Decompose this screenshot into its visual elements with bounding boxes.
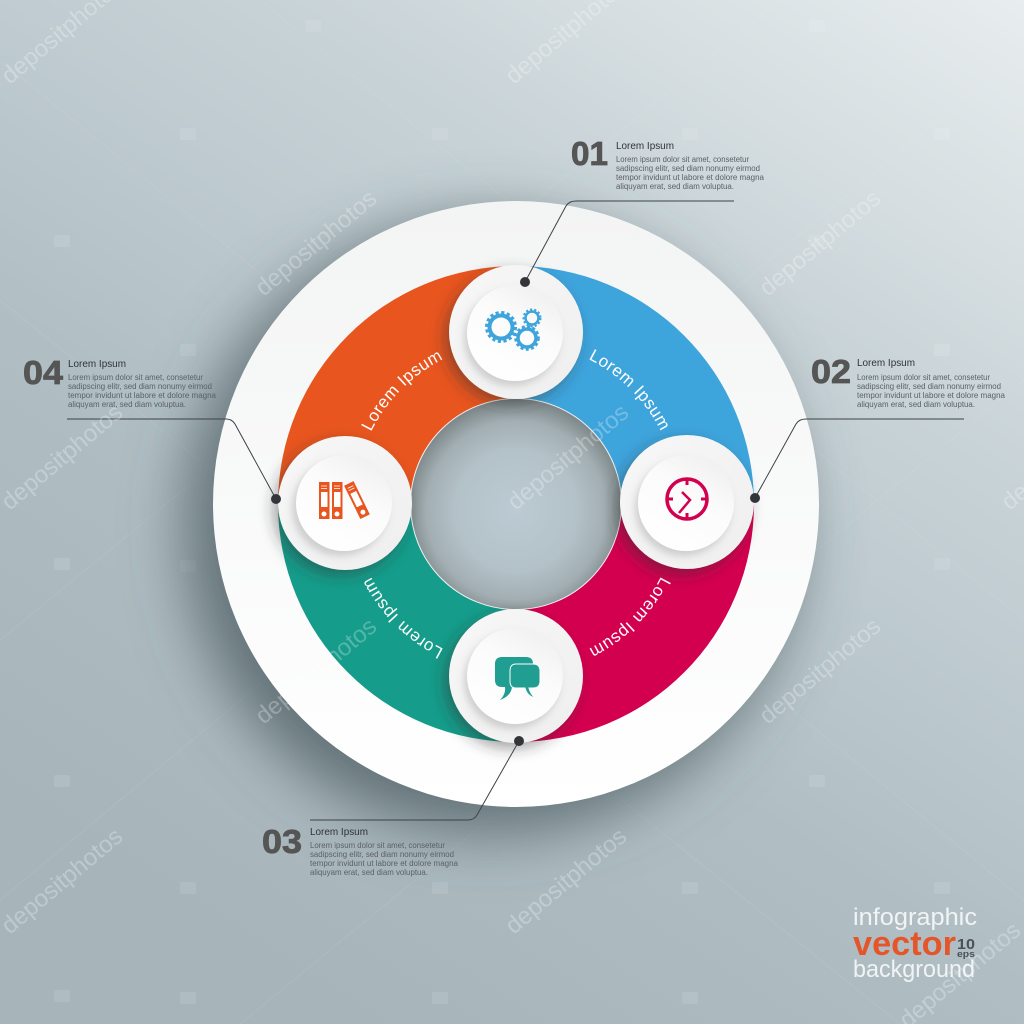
segment: magenta [516,504,754,742]
text block 01: Lorem ipsum dolor sit amet, consetetur [616,155,749,164]
marker 02 [750,493,760,503]
text block 03: 03 [262,823,302,860]
segment: blue [516,266,754,504]
text block 03: Lorem Ipsum [310,826,368,838]
logo: infographic vector background: background [853,956,975,983]
logo: infographic vector background: infographic [853,904,977,931]
text block 02: aliquyam erat, sed diam voluptua. [857,400,975,409]
callout line 03 [310,741,519,820]
text block 02: tempor invidunt ut labore et dolore magna [857,391,1006,400]
segment label: teal: Lorem Ipsum [364,578,443,659]
node 4: binders [273,436,412,576]
segment label: blue: Lorem Ipsum [590,349,668,430]
node 1: gears [444,265,583,405]
icon: binders [319,481,370,519]
text block 01 [571,135,765,191]
text block 01: sadipscing elitr, sed diam nonumy eirmod [616,164,760,173]
callout line 01 [525,201,734,282]
text block 04: sadipscing elitr, sed diam nonumy eirmod [68,382,212,391]
text block 01: tempor invidunt ut labore et dolore magna [616,173,765,182]
text block 02: Lorem ipsum dolor sit amet, consetetur [857,373,990,382]
text block 04: tempor invidunt ut labore et dolore magna [68,391,217,400]
text block 02 [811,353,1006,409]
marker 04 [271,494,281,504]
segment label: magenta: Lorem Ipsum [590,578,671,656]
logo: infographic vector background [853,904,977,983]
text block 03 [262,823,459,877]
text block 03: Lorem ipsum dolor sit amet, consetetur [310,841,445,850]
text block 04: Lorem Ipsum [68,358,126,370]
segment label: orange: Lorem Ipsum [361,352,442,431]
text block 04 [23,354,217,409]
text block 04: Lorem ipsum dolor sit amet, consetetur [68,373,203,382]
text: depositphotos [502,399,634,516]
text block 01: 01 [571,135,608,172]
icon: gears [486,310,540,350]
text: depositphotos [754,185,886,302]
logo: infographic vector background: eps [957,949,975,959]
text block 03: sadipscing elitr, sed diam nonumy eirmod [310,850,454,859]
text: depositphotos [754,613,886,730]
icon: speech bubbles [495,657,540,700]
text block 02: Lorem Ipsum [857,357,915,369]
text: depositphotos [250,613,382,730]
callout line 02 [755,419,964,498]
text: depositphotos [0,823,128,940]
centre hole [410,398,622,610]
callout line 04 [67,419,276,499]
text block 01: Lorem Ipsum [616,140,674,152]
text block 02: sadipscing elitr, sed diam nonumy eirmod [857,382,1001,391]
text block 03: tempor invidunt ut labore et dolore magna [310,859,459,868]
text block 04: 04 [23,354,64,391]
text: depositphotos [250,185,382,302]
shadow of main disc [184,218,800,834]
text block 03: aliquyam erat, sed diam voluptua. [310,868,428,877]
node 3: speech bubbles [444,609,583,749]
segment: orange [278,266,516,504]
logo: infographic vector background: vector [853,925,956,963]
text: depositphotos [500,823,632,940]
text block 02: 02 [811,353,851,390]
icon: clock [667,479,707,519]
marker 01 [520,277,530,287]
text block 01: aliquyam erat, sed diam voluptua. [616,182,734,191]
text: depositphotos [0,399,128,516]
segment: teal [278,504,516,742]
main white disc [213,201,819,807]
text block 04: aliquyam erat, sed diam voluptua. [68,400,186,409]
logo: infographic vector background: 10 [957,936,975,953]
marker 03 [514,736,524,746]
node 2: clock [615,435,754,575]
